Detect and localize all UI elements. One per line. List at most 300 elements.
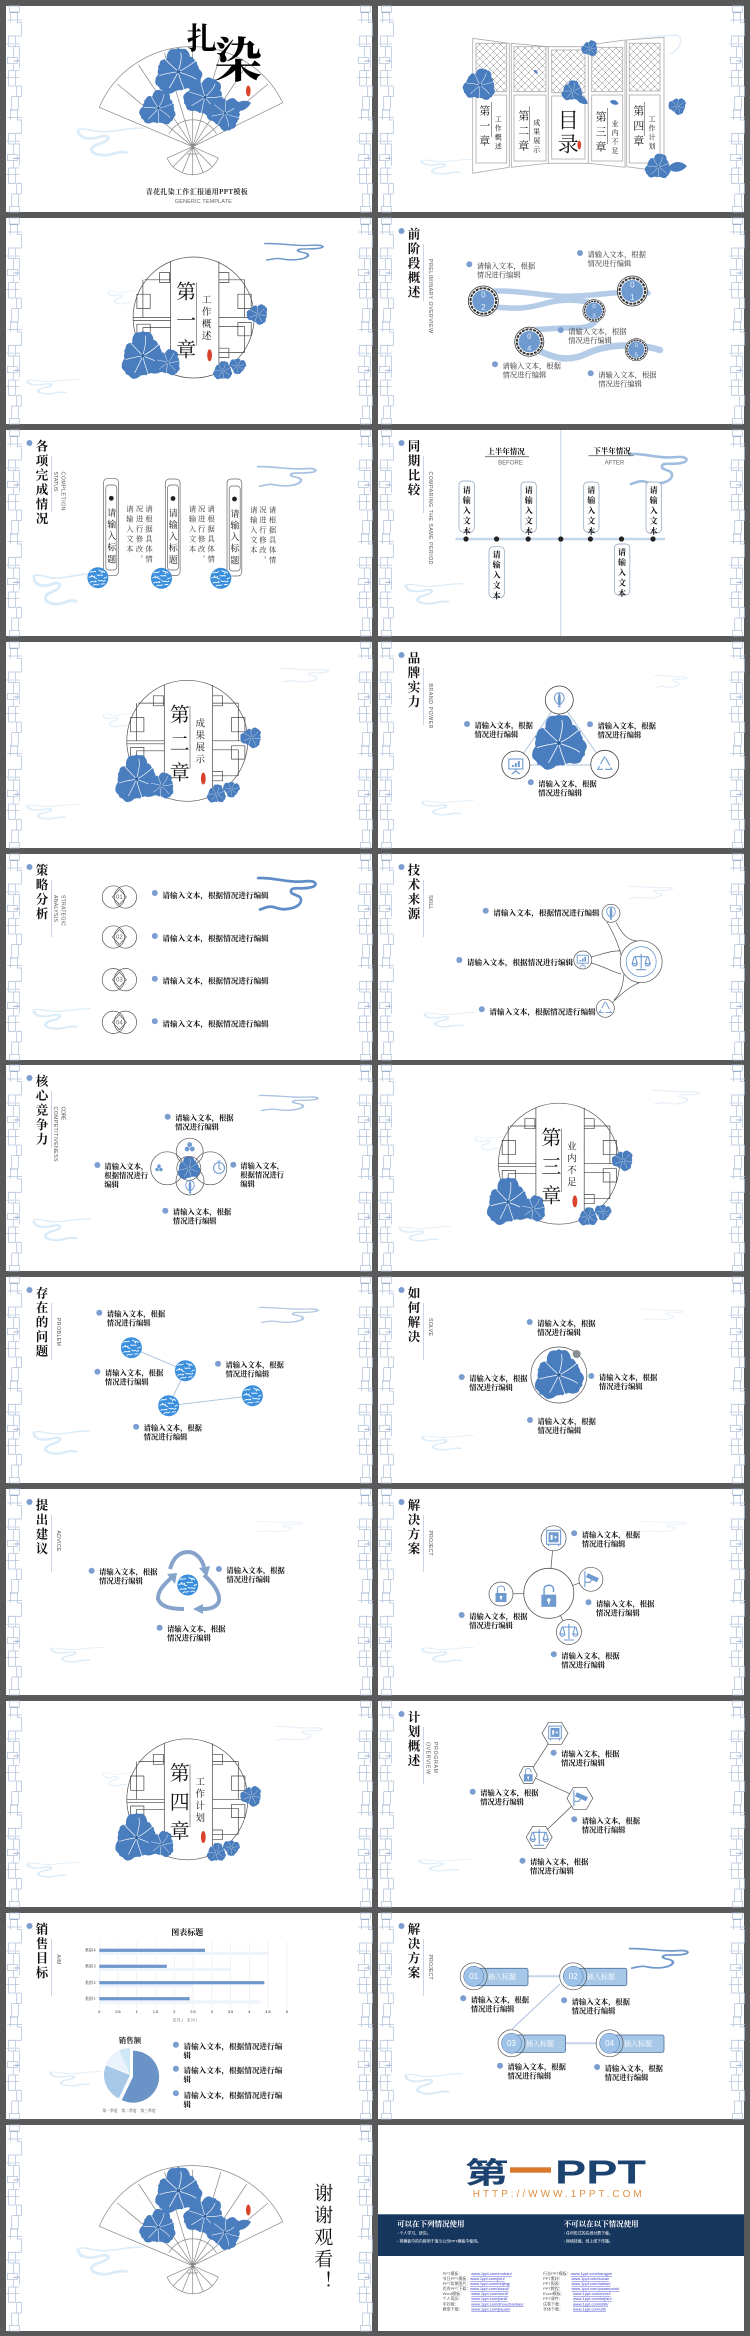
text block: 请输入文本，根据	[226, 1361, 285, 1371]
subtitle: 青花扎染工作汇报通用PPT模板	[146, 187, 248, 196]
pie chart: 第一季度 第二季度 第三季度	[102, 2108, 156, 2113]
bar chart: 类别 4	[85, 1948, 96, 1953]
cloud	[77, 2247, 143, 2274]
text block: 情况进行编辑	[598, 379, 643, 388]
text block: 请输入文本，根据情况进行编	[183, 2041, 283, 2052]
text block	[594, 2064, 664, 2082]
pill labels: 请输入文本	[618, 547, 626, 599]
usage band: 可以在下列情况使用	[397, 2218, 464, 2228]
heading: 如何解决	[406, 1286, 420, 1344]
chapter 3 label: 第三章	[594, 111, 606, 156]
title: 扎	[187, 23, 217, 56]
heading: STRATEGIC	[60, 895, 66, 926]
pill labels: 请输入文本	[462, 485, 471, 537]
link list right: www.1ppt.com/tubiao/	[572, 2281, 612, 2286]
flower in circle	[531, 1347, 588, 1403]
venn 01: 01	[116, 895, 123, 901]
numbered nodes	[468, 276, 647, 361]
bar chart: 0.5	[115, 2010, 121, 2014]
text block	[96, 1310, 166, 1328]
text block: 请输入文本，根据	[537, 1319, 596, 1329]
chapter title	[166, 1762, 205, 1850]
clouds	[33, 878, 316, 1029]
slide 4: preliminary overview	[378, 218, 745, 424]
link list right: www.1ppt.com/hangye/	[571, 2271, 613, 2276]
after header: AFTER	[605, 460, 625, 466]
text block	[528, 779, 597, 797]
heading	[398, 652, 433, 729]
text block: 情况进行编辑	[173, 1217, 217, 1226]
usage band: 不可以在以下情况使用	[564, 2218, 639, 2228]
heading: 策略分析	[34, 862, 48, 922]
heading: 计划概述	[406, 1710, 420, 1768]
bar chart: 1.5	[153, 2010, 158, 2014]
text block	[173, 2065, 283, 2084]
text block	[460, 1995, 530, 2013]
text block: 请输入文本，根据	[582, 1816, 641, 1826]
text block: 请输入文本，根据	[538, 779, 597, 789]
step 03	[498, 2030, 566, 2057]
slide 15: advice	[6, 1489, 373, 1695]
brush connectors	[483, 291, 660, 358]
link list left: www.1ppt.com/jiaoan/	[471, 2306, 511, 2312]
heading	[26, 1286, 61, 1360]
text block	[466, 261, 536, 279]
pie chart	[102, 2035, 159, 2113]
slide 22: publisher page	[378, 2125, 744, 2331]
slide 5: completion status	[6, 430, 373, 636]
link list right	[543, 2270, 620, 2312]
column 2: 请输入标题	[167, 507, 178, 566]
text block	[588, 370, 657, 388]
text row: 请输入文本，根据情况进行编辑	[162, 933, 269, 944]
link list left: 教案下载：	[443, 2306, 463, 2312]
clouds	[33, 467, 316, 604]
column 3	[210, 479, 278, 589]
text block	[215, 1361, 285, 1379]
slide 7: chapter two	[6, 642, 373, 848]
step 04	[596, 2030, 664, 2057]
heading: ANALYSIS	[52, 895, 58, 923]
timeline	[456, 430, 665, 636]
overlapping circles	[151, 1138, 227, 1195]
text block: 情况进行编辑	[167, 1634, 212, 1643]
text block: 请输入文本，根据	[226, 1566, 285, 1576]
link list left	[443, 2270, 524, 2312]
clouds	[27, 1726, 322, 1877]
text block	[89, 1568, 158, 1586]
text block: 请输入文本，根据	[508, 2063, 567, 2073]
text block: 情况进行编辑	[598, 730, 642, 739]
chapter 2 label: 成果展示	[532, 118, 541, 155]
text block: 情况进行编辑	[226, 1575, 271, 1584]
text block: 请输入文本，根据	[561, 1750, 620, 1760]
chapter title	[166, 704, 205, 791]
logo: PPT	[555, 2154, 646, 2190]
heading	[26, 1922, 61, 1996]
link list left: 节日PPT模板：	[443, 2275, 470, 2281]
text block: 请输入文本，根据	[530, 1858, 589, 1868]
link list right: PPT图表：	[543, 2280, 563, 2286]
after header: 下半年情况	[593, 446, 631, 456]
title: 染	[214, 35, 262, 88]
clouds	[422, 1521, 686, 1662]
step 02	[560, 1963, 627, 1990]
column 2	[151, 479, 216, 589]
text row: 请输入文本，根据情况进行编辑	[162, 1018, 269, 1029]
text block: 根据情况进行	[240, 1171, 285, 1180]
text block: 请输入文本，根据	[167, 1625, 226, 1635]
chapter title: 成果展示	[193, 717, 205, 766]
heading: PROGRAM	[432, 1742, 438, 1773]
text block	[558, 327, 627, 345]
slide 21: thanks	[6, 2125, 373, 2331]
heading: COMPETITIVENESS	[52, 1106, 58, 1162]
pill labels: 请输入文本	[492, 550, 501, 602]
slide 11: core competitiveness	[6, 1065, 373, 1271]
link list right: www.1ppt.com/excel/	[573, 2291, 611, 2296]
text block: 情况进行编辑	[561, 1759, 606, 1768]
usage band: ◦ 将模板中的内容用于演示公司PPT模板中使用。	[397, 2238, 481, 2244]
link list left: www.1ppt.com/xiazai/	[470, 2286, 510, 2291]
pill labels: 请输入文本	[524, 485, 533, 537]
text block: 情况进行编辑	[471, 2004, 515, 2013]
slide 16: project lock hub	[378, 1489, 745, 1695]
column 1	[87, 478, 154, 588]
slide 14: solve	[378, 1277, 745, 1483]
column 3: 况进行修改，	[259, 506, 268, 566]
bar chart: 1	[136, 2010, 138, 2014]
round window graphic	[118, 257, 274, 383]
bar chart: 3	[211, 2010, 213, 2014]
text block: 请输入文本，根据	[572, 1997, 631, 2007]
text block: 请输入文本，根据	[105, 1369, 164, 1379]
text block: 请输入文本，根据	[502, 361, 562, 371]
slide 17: chapter four	[6, 1701, 373, 1907]
text block: 情况进行编辑	[582, 1825, 626, 1834]
slide 20: project process	[378, 1913, 745, 2119]
text block: 请输入文本，根据	[107, 1310, 166, 1320]
heading: OVERVIEW	[424, 1742, 430, 1774]
text block: 情况进行编辑	[572, 2006, 616, 2015]
text block	[520, 1858, 589, 1876]
text block: 请输入文本，	[104, 1162, 148, 1172]
text block: 请输入文本，根据	[596, 1599, 655, 1609]
heading: 销售目标	[34, 1922, 48, 1980]
heading: PROJECT	[427, 1530, 433, 1556]
logo	[465, 2154, 646, 2200]
text block: 情况进行编辑	[226, 1370, 270, 1379]
link list right: PPT教程：	[543, 2285, 563, 2291]
text block	[173, 2090, 283, 2109]
clouds	[33, 1307, 318, 1454]
chapter 4 label: 工作计划	[648, 116, 656, 152]
clouds	[421, 35, 681, 174]
bar chart: 0	[98, 2010, 100, 2014]
pill labels: 请输入文本	[587, 485, 596, 537]
step 02: 插入标题	[587, 1972, 615, 1981]
text block: 请输入文本，根据	[469, 1612, 528, 1622]
text block	[551, 1651, 620, 1669]
link list right: www.1ppt.com/kejian/	[573, 2296, 613, 2301]
text block: 情况进行编辑	[144, 1433, 188, 1442]
text block	[157, 1625, 226, 1643]
clouds	[422, 675, 687, 815]
chapter 1 label	[478, 102, 502, 152]
text block: 情况进行编辑	[99, 1577, 144, 1586]
text block: 情况进行编辑	[502, 370, 547, 379]
bar chart: 2.5	[190, 2010, 196, 2014]
fan with flowers	[99, 2166, 283, 2294]
text block: 情况进行编辑	[588, 259, 632, 268]
cloud	[419, 1859, 470, 1871]
link list left: www.1ppt.com/word/	[471, 2291, 509, 2296]
clouds	[51, 1521, 302, 1662]
heading	[398, 226, 433, 333]
heading: 核心竞争力	[34, 1074, 48, 1147]
before header	[485, 446, 529, 466]
link list right: Excel模板：	[543, 2290, 565, 2296]
text block: 辑	[183, 2099, 191, 2109]
cloud	[50, 2072, 101, 2086]
bar chart: 4	[248, 2010, 250, 2014]
slide 1: cover	[6, 6, 373, 212]
text block: 请输入文本，根据	[99, 1568, 158, 1578]
numbered nodes: 0	[635, 343, 639, 349]
venn 04	[102, 1011, 137, 1034]
text block: 请输入文本，根据	[598, 370, 657, 380]
link list right: www.1ppt.com/shiti/	[573, 2302, 609, 2306]
column 3: 请输入文本	[249, 505, 259, 556]
text block	[216, 1566, 285, 1584]
column 1: 况进行修改，	[135, 505, 144, 565]
before header: BEFORE	[498, 460, 523, 466]
text block: 请输入文本，根据	[175, 1114, 234, 1124]
text block: 请输入文本，根据	[480, 1789, 539, 1799]
text block: 情况进行编辑	[568, 336, 613, 345]
text block: 情况进行编辑	[107, 1319, 151, 1328]
text row: 请输入文本，根据情况进行编辑	[489, 1006, 596, 1017]
text block: 请输入文本，根据	[598, 721, 657, 731]
text block	[571, 1530, 641, 1548]
text block: 情况进行编辑	[508, 2072, 552, 2081]
heading: 各项完成情况	[34, 438, 48, 526]
text block: 情况进行编辑	[105, 1378, 149, 1387]
venn 03	[102, 968, 137, 991]
chapter 1 label: 第一章	[478, 105, 490, 150]
before header: 上半年情况	[487, 446, 525, 456]
link list right: www.1ppt.com/sucai/	[572, 2276, 610, 2281]
numbered nodes: 4	[527, 343, 532, 352]
link list left: 优秀PPT下载：	[443, 2285, 470, 2291]
text block	[470, 1789, 539, 1807]
cloud	[77, 128, 143, 155]
bar chart: 类别 1	[85, 1996, 96, 2001]
link list left: www.1ppt.com/beijing/	[470, 2281, 511, 2286]
network of porcelain balls	[121, 1337, 263, 1416]
column 3: 请输入标题	[229, 508, 239, 567]
chapter 3 label: 业内不足	[611, 119, 619, 156]
link list left: www.1ppt.com/jieri/	[470, 2276, 506, 2281]
heading: SOLVE	[427, 1318, 433, 1337]
heading: PROJECT	[427, 1954, 433, 1980]
thank you text: 谢谢观看！	[311, 2183, 333, 2293]
heading: SKILL	[427, 895, 433, 909]
text block: 请输入文本，根据	[538, 1417, 597, 1427]
heading	[398, 1710, 438, 1784]
column 1: 请根据具体情	[145, 504, 154, 565]
connectors	[512, 1976, 597, 2043]
text block: 编辑	[240, 1180, 256, 1189]
chapter title	[538, 1127, 577, 1214]
column 3: 请根据具体情	[268, 505, 278, 566]
text block	[588, 1373, 658, 1391]
venn 02: 02	[116, 935, 123, 941]
text row: 请输入文本，根据情况进行编辑	[493, 908, 600, 919]
text block: 根据情况进行	[104, 1171, 149, 1180]
bar chart	[85, 1927, 288, 2022]
subtitle	[146, 187, 248, 205]
chapter 1 label: 工作概述	[494, 116, 502, 152]
text block: 请输入文本，根据	[561, 1651, 620, 1661]
step 03: 插入标题	[526, 2039, 554, 2048]
text block	[230, 1162, 285, 1189]
text row: 请输入文本，根据情况进行编辑	[467, 957, 574, 968]
usage band: ◦ 任何形式的在线付费下载。	[564, 2230, 613, 2236]
column 2: 请根据具体情	[207, 504, 216, 565]
slide 6: same period comparison	[378, 430, 745, 636]
pie chart: 销售额	[119, 2035, 142, 2045]
cycle arrows with ball	[158, 1552, 219, 1614]
link list right: www.1ppt.com/ziti/	[573, 2306, 607, 2312]
hub diagram	[574, 904, 662, 1017]
text block	[527, 1319, 596, 1337]
usage band	[378, 2214, 744, 2256]
text row: 请输入文本，根据情况进行编辑	[162, 890, 269, 901]
round window graphic	[112, 680, 268, 807]
text block: 情况进行编辑	[538, 788, 583, 797]
chapter title: 第二章	[166, 704, 189, 791]
heading: CORE	[60, 1106, 66, 1121]
title	[187, 23, 262, 88]
numbered nodes: 0	[481, 290, 486, 300]
heading	[398, 1498, 433, 1572]
link list right: PPT课件：	[543, 2295, 563, 2301]
text block: 情况进行编辑	[538, 1426, 582, 1435]
text block: 请输入文本，根据	[568, 327, 627, 337]
numbered nodes: 5	[635, 352, 639, 358]
text block: 辑	[183, 2050, 191, 2060]
pill labels: 请输入文本	[649, 485, 658, 537]
text block	[587, 721, 657, 739]
clouds	[405, 1949, 688, 2094]
hexagon chain	[519, 1722, 593, 1848]
triangle diagram	[502, 686, 619, 779]
slide 12: chapter three	[378, 1065, 745, 1271]
fan with flowers	[99, 47, 283, 175]
text block: 情况进行编辑	[561, 1660, 606, 1669]
venn 03: 03	[116, 978, 123, 984]
link list left: PPT模板：	[443, 2270, 462, 2276]
heading: STATUS	[52, 472, 58, 492]
chapter title: 工作概述	[200, 295, 211, 343]
link list right: PPT素材：	[543, 2275, 563, 2281]
clouds	[422, 1309, 683, 1450]
step 04: 插入标题	[624, 2039, 652, 2048]
text row: 请输入文本，根据情况进行编辑	[162, 976, 269, 987]
venn 02	[102, 926, 137, 948]
heading: 存在的问题	[34, 1286, 48, 1359]
heading	[398, 1922, 433, 1996]
text block: 情况进行编辑	[480, 1798, 525, 1807]
step 03: 03	[507, 2039, 516, 2048]
heading: COMPARING THE SAME PERIOD	[427, 472, 433, 565]
chapter 4 label	[632, 102, 656, 152]
column 2: 况进行修改，	[197, 505, 207, 565]
heading: 技术来源	[406, 862, 420, 922]
bar chart: 4.5	[265, 2010, 271, 2014]
numbered nodes: 1	[630, 293, 635, 302]
text block: 情况进行编辑	[474, 730, 519, 739]
text block	[94, 1369, 164, 1387]
heading	[26, 438, 66, 526]
heading: COMPLETION	[60, 472, 66, 511]
heading	[398, 862, 433, 937]
chapter 4 label: 第四章	[632, 105, 644, 150]
link list left: 个人简历：	[443, 2295, 463, 2301]
heading: PROBLEM	[55, 1318, 61, 1346]
chapter title: 业内不足	[565, 1140, 577, 1189]
column 2: 请输入文本	[188, 504, 198, 555]
step 04: 04	[605, 2039, 615, 2048]
text block: 请输入文本，根据	[474, 721, 534, 731]
round window graphic	[483, 1103, 640, 1230]
venn 04: 04	[116, 1020, 123, 1026]
heading: 同期比较	[406, 440, 420, 498]
text block	[577, 250, 647, 268]
chapter title: 工作计划	[193, 1777, 205, 1825]
text block: 情况进行编辑	[599, 1382, 643, 1391]
clouds	[27, 243, 323, 394]
text block: 请输入文本，根据	[471, 1995, 530, 2005]
bar chart: 类别 3	[85, 1964, 96, 1969]
bar chart: 2	[173, 2010, 175, 2014]
chapter 2 label	[517, 106, 541, 155]
text block: 情况进行编辑	[469, 1383, 514, 1392]
text block: 情况进行编辑	[537, 1328, 582, 1337]
text block	[497, 2063, 567, 2081]
chapter title: 第一章	[173, 280, 196, 368]
numbered nodes: 0	[527, 331, 531, 340]
bar chart: 3.5	[228, 2010, 233, 2014]
step 01	[460, 1963, 528, 1990]
link list right: 试卷下载：	[543, 2300, 563, 2306]
heading: PRELIMINARY OVERVIEW	[427, 259, 433, 333]
bar chart: 类别 2	[85, 1980, 96, 1985]
clouds	[424, 886, 672, 1027]
heading	[26, 862, 66, 937]
link list left: 手抄报：	[443, 2300, 459, 2306]
text block: 情况进行编辑	[605, 2073, 649, 2082]
numbered nodes: 2	[481, 303, 486, 312]
chapter 3 label	[594, 108, 619, 156]
link list left: PPT背景图片：	[443, 2280, 470, 2286]
clouds	[33, 1095, 318, 1240]
slide 13: problem	[6, 1277, 373, 1483]
logo: HTTP://WWW.1PPT.COM	[473, 2189, 642, 2200]
heading: 品牌实力	[406, 652, 420, 710]
clouds	[405, 454, 687, 604]
